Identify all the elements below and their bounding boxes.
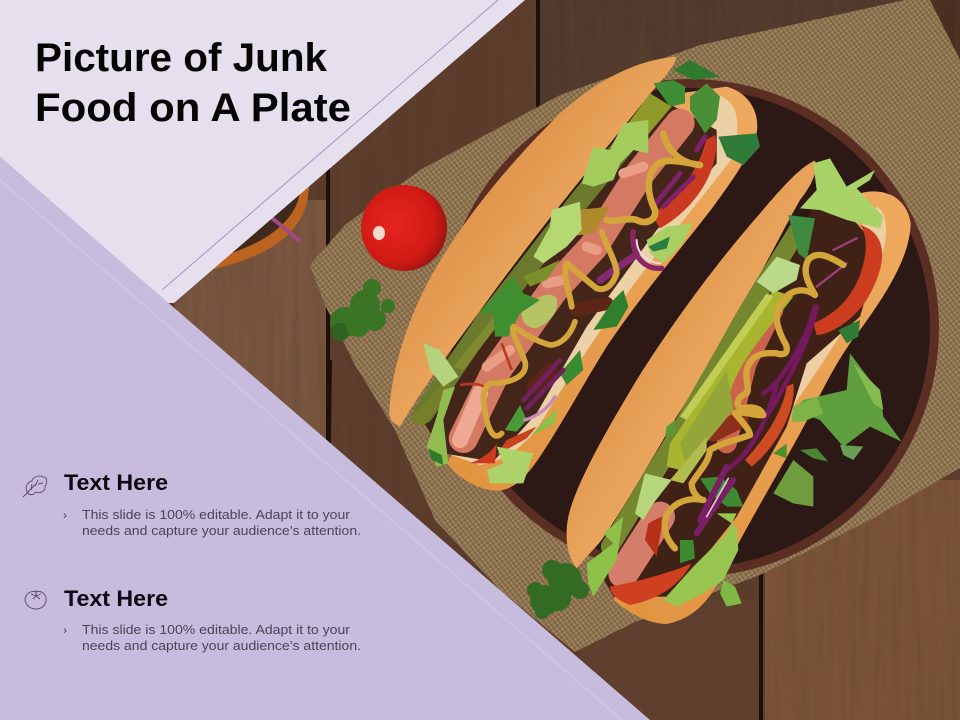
lower bun (613, 191, 911, 624)
tomato slices (652, 135, 716, 228)
red onion (523, 137, 705, 420)
bun interior (447, 93, 737, 465)
item two (25, 586, 361, 653)
plate (441, 79, 939, 577)
hot dog right (567, 158, 911, 624)
title: Picture of Junk (35, 36, 328, 80)
description: This slide is 100% editable. Adapt it to your (82, 507, 351, 522)
heading: Text Here (64, 470, 168, 495)
upper bun (389, 57, 677, 427)
parsley left (330, 279, 395, 341)
mustard (665, 255, 843, 548)
sausage (623, 310, 773, 573)
title: Food on A Plate (35, 86, 351, 130)
heading: Text Here (64, 586, 168, 611)
icon: lettuce leaf (23, 476, 47, 497)
burlap mat (310, 0, 960, 652)
description (63, 507, 361, 538)
title (35, 36, 351, 130)
item one (23, 470, 361, 538)
long pickle (667, 290, 793, 470)
icon: tomato (25, 590, 46, 609)
pickles (623, 93, 672, 140)
hot dog left (389, 57, 760, 491)
mustard (483, 133, 700, 436)
orange salad bowl (200, 180, 309, 269)
lilac panel (0, 157, 650, 720)
lettuce (587, 158, 883, 607)
description: › (63, 623, 67, 637)
sausage (460, 123, 680, 440)
lettuce (423, 120, 693, 483)
parsley bottom (527, 560, 589, 619)
upper bun (567, 161, 816, 568)
panel decorative line (162, 0, 498, 290)
description: This slide is 100% editable. Adapt it to your (82, 622, 351, 637)
red onion (697, 238, 857, 533)
description: needs and capture your audience’s attention. (82, 638, 361, 653)
tomato (361, 185, 447, 271)
dark green leaves (428, 60, 760, 465)
bun interior (607, 207, 886, 597)
lower bun (447, 87, 757, 491)
filling base (420, 93, 717, 462)
description (63, 622, 361, 653)
tomato slices (813, 225, 882, 335)
ketchup highlight (460, 343, 512, 387)
description: › (63, 508, 67, 522)
inner green strip (423, 113, 650, 413)
lettuce on plate (773, 353, 902, 507)
description: needs and capture your audience’s attention. (82, 523, 361, 538)
filling base (593, 193, 880, 597)
top pale panel (0, 0, 525, 303)
dark green leaves (665, 215, 860, 563)
inner green strip (610, 227, 800, 547)
